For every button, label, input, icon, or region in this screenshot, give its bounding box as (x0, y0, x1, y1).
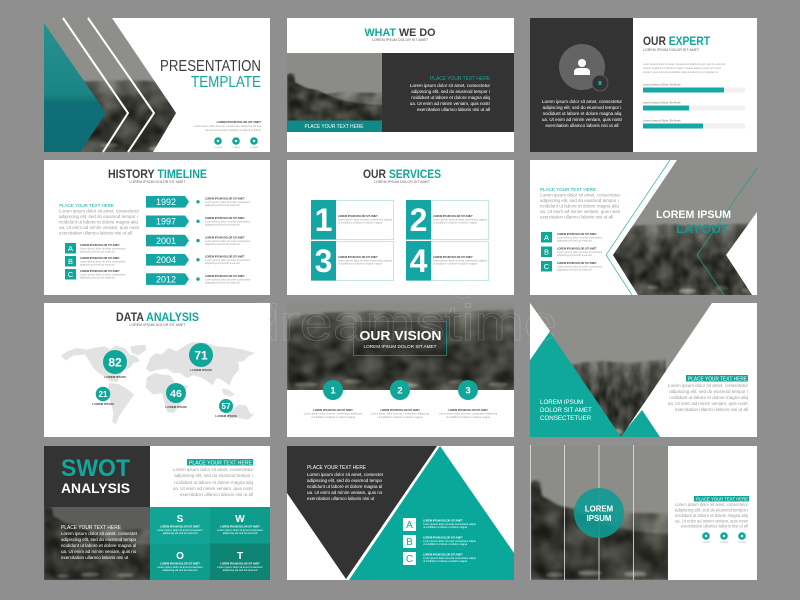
teal triangle left (530, 331, 622, 437)
dark triangle text: PLACE YOUR TEXT HERE (307, 465, 366, 471)
paragraph: veniam, quis nostrud exercitation ullamco laboris nisi ut aliquip ex (643, 70, 719, 74)
photo triangle (530, 303, 712, 439)
ABC list: Lorem ipsum dolor sit amet consectetur (557, 250, 603, 254)
vision title box: OUR VISION (360, 328, 442, 343)
heading: OUR SERVICES (363, 169, 441, 181)
swot cell S: S (177, 514, 184, 525)
dark text panel: PLACE YOUR TEXT HERE (430, 76, 491, 82)
ABC list: adipiscing elit sed do eiusmod (80, 250, 115, 254)
paragraph (643, 62, 726, 74)
paragraph: Lorem ipsum dolor sit amet, consectetur adipiscing elit, sed do eiusmod (643, 62, 726, 66)
intro text: Lorem ipsum dolor sit amet, consectetur (59, 208, 140, 214)
icon: person avatar (559, 44, 608, 91)
timeline: LOREM IPSUM DOLOR SIT AMET (205, 275, 245, 278)
right text: adipiscing elit, sed do eiusmod tempor i (174, 473, 253, 478)
swot cell W (210, 507, 270, 544)
swot cell O: O (176, 551, 184, 562)
bio text: adipiscing elit, sed do eiusmod tempor i (543, 105, 621, 110)
timeline: adipiscing elit sed do eiusmod (205, 203, 240, 207)
teal caption: LOREM IPSUM (540, 399, 583, 406)
swot cell T: LOREM IPSUM DOLOR SIT AMET (220, 562, 260, 566)
ABC list: adipiscing elit sed do eiusmod (557, 238, 592, 242)
heading: HISTORY TIMELINE (108, 169, 207, 181)
dark triangle text: Lorem ipsum dolor sit amet, consectet (307, 472, 384, 477)
item B: B (406, 537, 413, 548)
teal caption bar: PLACE YOUR TEXT HERE (304, 124, 364, 130)
teal circle (574, 488, 624, 538)
ABC list: B (544, 248, 549, 256)
timeline: 1997 (156, 216, 176, 226)
swot title: ANALYSIS (61, 480, 130, 496)
intro text (540, 187, 621, 220)
icon row: LOREM (250, 147, 258, 149)
icon row: LOREM (720, 542, 728, 544)
ABC list: adipiscing elit sed do eiusmod (557, 253, 592, 257)
swot cell T: T (237, 551, 243, 562)
ABC list (65, 243, 126, 280)
title (160, 58, 261, 91)
step 1: LOREM IPSUM DOLOR SIT AMET (313, 409, 353, 412)
teal caption: DOLOR SIT AMET (540, 407, 592, 414)
panel: triangle abc (287, 446, 514, 580)
panel: our services (287, 160, 514, 295)
right text: ua. Ut enim ad minim veniam, quis nostr (173, 486, 253, 491)
item C: C (406, 554, 413, 565)
intro text: Lorem ipsum dolor sit amet, consectetur (540, 192, 621, 198)
timeline: LOREM IPSUM DOLOR SIT AMET (205, 236, 245, 239)
step 3: LOREM IPSUM DOLOR SIT AMET (448, 409, 488, 412)
timeline: adipiscing elit sed do eiusmod (205, 261, 240, 265)
service 2: LOREM IPSUM DOLOR SIT AMET (433, 215, 473, 218)
photo caption: Lorem ipsum dolor sit amet, consectet (61, 531, 138, 536)
dark text panel: adipiscing elit, sed do eiusmod tempor i (411, 89, 490, 94)
right text (173, 459, 253, 497)
intro text: ncididunt ut labore et dolore magna aliq (540, 204, 619, 208)
intro text: exercitation ullamco laboris nisi ut all (59, 230, 132, 236)
data bubbles: LOREM IPSUM (165, 405, 187, 409)
item A (403, 518, 477, 531)
icon row: LOREM (232, 147, 240, 149)
heading: LOREM IPSUM DOLOR SIT AMET (374, 180, 431, 184)
right text: ua. Ut enim ad minim veniam, quis nostr (668, 401, 748, 406)
step 2: ut incididunt ut labore et dolore magna (378, 415, 423, 419)
right text: ncididunt ut labore et dolore magna aliq (675, 513, 748, 518)
swot cell S (150, 507, 210, 544)
vision title box: LOREM IPSUM DOLOR SIT AMET (364, 344, 437, 349)
step 2 (371, 380, 430, 419)
ABC list: Lorem ipsum dolor sit amet consectetur (80, 260, 126, 264)
dark triangle text: ncididunt ut labore et dolore magna al (307, 484, 382, 489)
dark text panel: ncididunt ut labore et dolore magna aliq (411, 95, 490, 100)
step 1 (304, 380, 363, 419)
heading: LOREM IPSUM DOLOR SIT AMET (372, 38, 429, 42)
teal circle: IPSUM (587, 514, 611, 523)
progress bars (643, 82, 745, 128)
ABC list: Lorem ipsum dolor sit amet consectetur (557, 264, 603, 268)
step 3: ut incididunt ut labore et dolore magna (446, 415, 491, 419)
data bubbles: 71 (194, 348, 208, 362)
ABC list: B (68, 257, 73, 266)
timeline: Lorem ipsum dolor sit amet consectetur (205, 277, 251, 281)
swot cell T: adipiscing elit sed do eiusmod (223, 568, 258, 572)
icon row (702, 532, 746, 544)
swot cell O: Lorem ipsum dolor sit amet consectetur (157, 565, 203, 569)
intro text: ncididunt ut labore et dolore magna aliq (59, 220, 138, 224)
service 1 (311, 200, 394, 240)
bio text: ncididunt ut labore et dolore magna aliq (543, 111, 622, 116)
teal caption (540, 399, 592, 422)
service 3 (311, 241, 394, 280)
data bubbles: LOREM IPSUM (190, 368, 212, 372)
bio text: exercitation ullamco laboris nisi ut all (545, 123, 619, 128)
service 2: ut incididunt ut labore et dolore magna (433, 220, 478, 224)
intro text: ua. Ut enim ad minim veniam, quis nostr (59, 225, 140, 230)
timeline: 2004 (156, 255, 176, 265)
panel: our vision (287, 303, 515, 437)
dark triangle text (307, 465, 384, 501)
right text: exercitation ullamco laboris nisi ut all (180, 492, 253, 497)
photo caption: ncididunt ut labore et dolore magna al (61, 543, 136, 548)
panel: swot analysis (44, 446, 270, 580)
ABC list: LOREM IPSUM DOLOR SIT AMET (557, 262, 597, 265)
heading (656, 209, 731, 236)
ABC list: LOREM IPSUM DOLOR SIT AMET (80, 270, 120, 273)
data bubbles: 21 (99, 390, 108, 399)
paragraph: tempor incididunt ut labore et dolore magna aliqua ut enim ad minim (643, 66, 721, 70)
dark triangle text: exercitation ullamco laboris nisi ut (307, 496, 375, 501)
icon row: LOREM (702, 542, 710, 544)
icon row: LOREM (214, 147, 222, 149)
world map (61, 342, 255, 424)
dark heading block (44, 446, 150, 507)
right text: ncididunt ut labore et dolore magna aliq (669, 395, 748, 400)
timeline: LOREM IPSUM DOLOR SIT AMET (205, 256, 245, 258)
step 2: 2 (397, 386, 403, 396)
step 3 (439, 380, 498, 419)
item C: ut incididunt ut labore et dolore magna (423, 559, 468, 563)
right text (675, 496, 749, 528)
ABC list: Lorem ipsum dolor sit amet consectetur (557, 236, 603, 240)
dark triangle (287, 446, 437, 579)
caption: Lorem ipsum dolor sit amet, consectetur adipiscing elit sed (194, 124, 262, 128)
item B: LOREM IPSUM DOLOR SIT AMET (423, 536, 463, 540)
bio text (542, 99, 623, 128)
photo (287, 53, 382, 120)
white corner (530, 303, 550, 360)
teal triangle right (620, 410, 660, 437)
timeline: 1992 (156, 197, 176, 207)
ABC list: LOREM IPSUM DOLOR SIT AMET (557, 248, 597, 250)
progress bars: Lorem Ipsum Dolor Sit Amet (643, 100, 681, 104)
vision title box (354, 322, 446, 356)
timeline: Lorem ipsum dolor sit amet consectetur (205, 220, 251, 224)
timeline: adipiscing elit sed do eiusmod (205, 222, 240, 226)
ABC list: LOREM IPSUM DOLOR SIT AMET (80, 244, 120, 247)
icon row (214, 137, 258, 149)
intro text: adipiscing elit, sed do eiusmod tempor i (59, 214, 138, 219)
service 1: LOREM IPSUM DOLOR SIT AMET (338, 215, 378, 218)
chevron photo (44, 18, 176, 152)
teal triangle (349, 446, 514, 580)
heading: LAYOUT (676, 222, 730, 236)
timeline: 2012 (156, 274, 176, 284)
swot cell W: W (235, 514, 245, 525)
service 1: 1 (315, 202, 332, 238)
ABC list (541, 232, 603, 272)
service 2: Lorem ipsum dolor sit amet consectetur adipisc (433, 218, 488, 222)
panel: what we do (287, 18, 514, 152)
service 4: 4 (410, 243, 428, 279)
data bubbles (92, 343, 237, 418)
swot cell T (210, 544, 270, 580)
swot cell W: LOREM IPSUM DOLOR SIT AMET (220, 526, 260, 528)
dark sidebar (530, 18, 633, 152)
bio text: Lorem ipsum dolor sit amet, consectetur (542, 99, 623, 104)
ABC list: A (68, 244, 73, 253)
progress bars: Lorem Ipsum Dolor Sit Amet (643, 118, 681, 122)
swot cell W: Lorem ipsum dolor sit amet consectetur (217, 528, 263, 532)
service 1: Lorem ipsum dolor sit amet consectetur adipisc (338, 218, 393, 222)
step 1: ut incididunt ut labore et dolore magna (311, 415, 356, 419)
right text: adipiscing elit, sed do eiusmod tempor i (675, 508, 748, 512)
timeline: 2001 (156, 236, 176, 246)
service 2: 2 (410, 202, 427, 238)
intro text: adipiscing elit, sed do eiusmod tempor i (540, 198, 619, 203)
intro text: ua. Ut enim ad minim veniam, quis nostr (540, 209, 621, 214)
panel: lorem ipsum layout (530, 160, 759, 297)
heading: DATA ANALYSIS (116, 312, 199, 324)
right text: PLACE YOUR TEXT HERE (189, 460, 253, 466)
heading: LOREM IPSUM DOLOR SIT AMET (129, 180, 186, 184)
data bubbles: LOREM IPSUM (92, 402, 114, 406)
service 4: ut incididunt ut labore et dolore magna (433, 262, 478, 266)
swot cell S: LOREM IPSUM DOLOR SIT AMET (160, 526, 200, 528)
swot cell O (150, 544, 210, 580)
step 2: Lorem ipsum dolor sit amet, consectetur adipiscing (371, 412, 430, 416)
photo (530, 446, 670, 580)
data bubbles: 57 (222, 402, 231, 411)
intro text: PLACE YOUR TEXT HERE (540, 187, 596, 193)
ABC list: C (68, 270, 74, 279)
teal circle: LOREM (585, 504, 613, 514)
intro text (59, 203, 140, 236)
swot title (61, 455, 130, 496)
photo caption: exercitation ullamco laboris nisi ut (61, 555, 129, 560)
timeline: Lorem ipsum dolor sit amet consectetur (205, 239, 251, 243)
right text: Lorem ipsum dolor sit amet, consectetur (675, 502, 748, 507)
icon row: LOREM (738, 542, 746, 544)
step 3: Lorem ipsum dolor sit amet, consectetur adipiscing (439, 412, 498, 416)
step 1: Lorem ipsum dolor sit amet, consectetur adipiscing (304, 412, 363, 416)
item A: Lorem ipsum dolor sit amet consectetur adipis (423, 522, 477, 526)
photo caption: adipiscing elit, sed do eiusmod tempo (61, 537, 137, 542)
service 3: LOREM IPSUM DOLOR SIT AMET (338, 256, 378, 259)
ABC list: adipiscing elit sed do eiusmod (557, 268, 592, 272)
watermark (247, 272, 557, 351)
heading: LOREM IPSUM DOLOR SIT AMET (643, 48, 700, 52)
heading: OUR EXPERT (643, 36, 710, 48)
item B: ut incididunt ut labore et dolore magna (423, 542, 468, 546)
photo caption (61, 525, 138, 560)
teal chevron (44, 23, 106, 152)
swot cell S: Lorem ipsum dolor sit amet consectetur (157, 528, 203, 532)
service 3: Lorem ipsum dolor sit amet consectetur adipisc (338, 258, 393, 262)
right text: adipiscing elit, sed do eiusmod tempor i (669, 389, 748, 394)
data bubbles: LOREM IPSUM (104, 375, 126, 379)
photo caption: PLACE YOUR TEXT HERE (61, 525, 122, 531)
right text (668, 375, 748, 412)
timeline: LOREM IPSUM DOLOR SIT AMET (205, 217, 245, 220)
title: TEMPLATE (191, 74, 261, 91)
right text: ncididunt ut labore et dolore magna aliq (174, 480, 253, 485)
timeline: adipiscing elit sed do eiusmod (205, 280, 240, 284)
data bubbles: 46 (170, 388, 182, 400)
chevron photo (610, 160, 759, 297)
caption: LOREM IPSUM DOLOR SIT AMET (217, 120, 261, 124)
step 3: 3 (465, 386, 471, 396)
teal caption bar (287, 120, 382, 132)
timeline: adipiscing elit sed do eiusmod (205, 242, 240, 246)
data bubbles: LOREM IPSUM (215, 414, 237, 418)
dark text panel: ua. Ut enim ad minim veniam, quis nostr (410, 101, 490, 106)
panel: lorem ipsum circle (530, 445, 757, 580)
ABC list: LOREM IPSUM DOLOR SIT AMET (557, 233, 597, 236)
photo (44, 504, 152, 580)
ABC list: C (544, 262, 550, 271)
ABC list: adipiscing elit sed do eiusmod (80, 262, 115, 266)
panel: data analysis (44, 303, 270, 437)
ABC list: LOREM IPSUM DOLOR SIT AMET (80, 257, 120, 260)
caption (194, 120, 262, 132)
watermark: dreamstime (247, 295, 557, 351)
caption: do eiusmod tempor incididunt ut labore et dolore (205, 128, 262, 132)
right text: ua. Ut enim ad minim veniam, quis nostr (675, 518, 748, 524)
right text: PLACE YOUR TEXT HERE (696, 496, 748, 502)
right text: Lorem ipsum dolor sit amet, consectetur (173, 467, 253, 472)
item B: Lorem ipsum dolor sit amet consectetur adipis (423, 539, 477, 543)
photo caption: ua. Ut enim ad minim veniam, quis no (61, 549, 137, 554)
photo (287, 303, 515, 393)
service 4: LOREM IPSUM DOLOR SIT AMET (433, 256, 473, 259)
dark text panel: exercitation ullamco laboris nisi ut all (417, 107, 490, 112)
teal caption: CONSECTETUER (540, 415, 592, 422)
swot cell W: adipiscing elit sed do eiusmod (223, 531, 258, 535)
service 4: Lorem ipsum dolor sit amet consectetur adipisc (433, 258, 488, 262)
heading: WHAT WE DO (364, 27, 436, 39)
item A: A (406, 520, 413, 531)
swot cell T: Lorem ipsum dolor sit amet consectetur (217, 565, 263, 569)
title: PRESENTATION (160, 58, 261, 75)
step 1: 1 (330, 386, 336, 396)
item C: Lorem ipsum dolor sit amet consectetur adipis (423, 556, 477, 560)
item C (403, 552, 477, 565)
service 2 (406, 200, 488, 240)
timeline: LOREM IPSUM DOLOR SIT AMET (205, 198, 245, 200)
intro text: exercitation ullamco laboris nisi ut all (540, 214, 613, 220)
item B (403, 535, 477, 548)
panel: presentation template (44, 18, 270, 155)
right text: Lorem ipsum dolor sit amet, consectetur (668, 383, 748, 388)
panel: our expert (530, 18, 757, 152)
bio text: ua. Ut enim ad minim veniam, quis nostr (542, 117, 623, 122)
service 1: ut incididunt ut labore et dolore magna (338, 220, 383, 224)
step 2: LOREM IPSUM DOLOR SIT AMET (380, 409, 420, 412)
teal chevron lines (606, 160, 670, 295)
timeline: Lorem ipsum dolor sit amet consectetur (205, 258, 251, 262)
right text: exercitation ullamco laboris nisi ut all (681, 524, 748, 528)
swot cell O: LOREM IPSUM DOLOR SIT AMET (160, 562, 200, 566)
heading: LOREM IPSUM DOLOR SIT AMET (129, 323, 186, 327)
vertical lines (530, 445, 634, 580)
ABC list: adipiscing elit sed do eiusmod (80, 276, 115, 280)
ABC list: Lorem ipsum dolor sit amet consectetur (80, 272, 126, 276)
white chevron lines (63, 18, 128, 152)
swot cell S: adipiscing elit sed do eiusmod (163, 531, 198, 535)
data bubbles: 82 (108, 356, 122, 370)
heading: LOREM IPSUM (656, 209, 731, 221)
service 3: 3 (315, 243, 332, 279)
right text: PLACE YOUR TEXT HERE (688, 376, 748, 382)
timeline (146, 196, 251, 285)
swot title: SWOT (61, 455, 130, 482)
progress bars: Lorem Ipsum Dolor Sit Amet (643, 82, 681, 86)
intro text: PLACE YOUR TEXT HERE (59, 203, 114, 209)
dark triangle text: adipiscing elit, sed do eiusmod tempo (307, 478, 383, 483)
dark triangle text: ua. Ut enim ad minim veniam, quis no (307, 490, 383, 495)
ABC list: Lorem ipsum dolor sit amet consectetur (80, 246, 126, 250)
ABC list: A (544, 233, 549, 242)
dark text panel: Lorem ipsum dolor sit amet, consectetur (410, 83, 490, 88)
item A: LOREM IPSUM DOLOR SIT AMET (423, 520, 463, 522)
item C: LOREM IPSUM DOLOR SIT AMET (423, 554, 463, 556)
panel: history timeline (44, 160, 270, 295)
panel: triangles (530, 303, 757, 439)
service 4 (406, 241, 488, 280)
timeline: Lorem ipsum dolor sit amet consectetur (205, 200, 251, 204)
service 3: ut incididunt ut labore et dolore magna (338, 262, 383, 266)
swot cell O: adipiscing elit sed do eiusmod (163, 568, 198, 572)
dark text panel (382, 53, 514, 132)
right text: exercitation ullamco laboris nisi ut all (675, 407, 748, 412)
item A: ut incididunt ut labore et dolore magna (423, 525, 468, 529)
